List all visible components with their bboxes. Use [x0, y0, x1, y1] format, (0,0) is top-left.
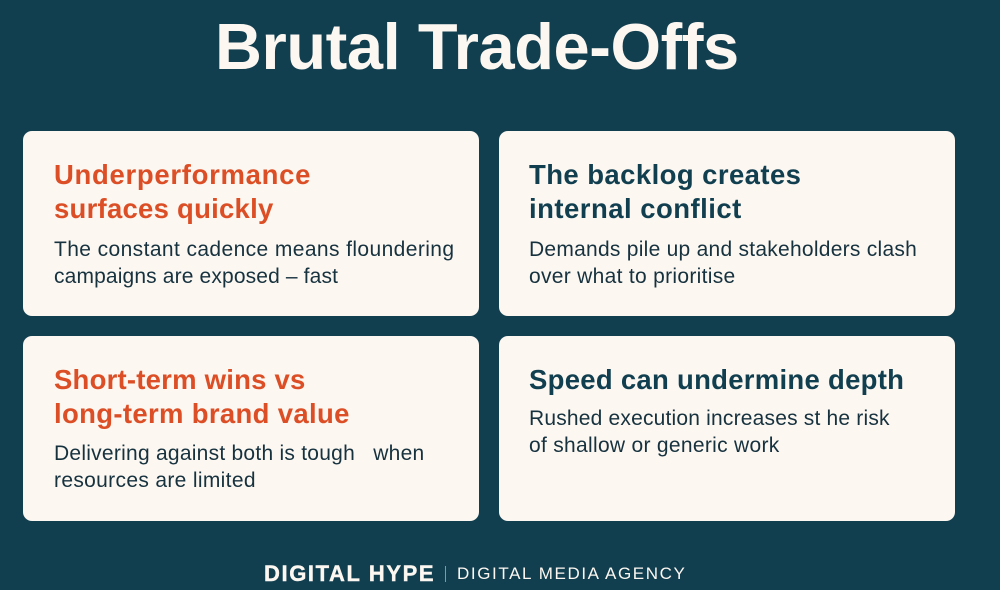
heading: short-term wins: [54, 364, 350, 429]
panel: underperformance: [23, 131, 479, 316]
text: underperformance: The constant cadence means floundering: [54, 238, 454, 261]
text: underperformance: campaigns are exposed – fast: [54, 265, 338, 288]
text: backlog: over what to prioritise: [529, 265, 735, 288]
text: short-term wins: [54, 442, 424, 492]
footer brand: [264, 561, 686, 586]
heading: underperformance: surfaces quickly: [54, 193, 274, 224]
heading: underperformance: Underperformance: [54, 159, 311, 190]
text: short-term wins: Delivering against both is tough when: [54, 442, 424, 465]
footer brand: DIGITAL HYPE: [264, 561, 435, 586]
footer brand: DIGITAL MEDIA AGENCY: [457, 564, 686, 583]
panel: short-term wins: [23, 336, 479, 521]
text: underperformance: [54, 238, 454, 288]
heading: short-term wins: long-term brand value: [54, 398, 350, 429]
text: short-term wins: resources are limited: [54, 469, 256, 492]
text: speed: [529, 407, 890, 457]
text: backlog: [529, 238, 917, 288]
heading: backlog: internal conflict: [529, 193, 742, 224]
panel: speed: [499, 336, 955, 521]
heading: underperformance: [54, 159, 311, 224]
text: backlog: Demands pile up and stakeholders clash: [529, 238, 917, 261]
heading: short-term wins: Short-term wins vs: [54, 364, 306, 395]
panel: backlog: [499, 131, 955, 316]
text: speed: Rushed execution increases st he risk: [529, 407, 890, 430]
heading: backlog: The backlog creates: [529, 159, 801, 190]
title: Brutal Trade-Offs: [215, 10, 739, 83]
heading: speed: Speed can undermine depth: [529, 364, 904, 395]
heading: backlog: [529, 159, 801, 224]
text: speed: of shallow or generic work: [529, 434, 780, 457]
